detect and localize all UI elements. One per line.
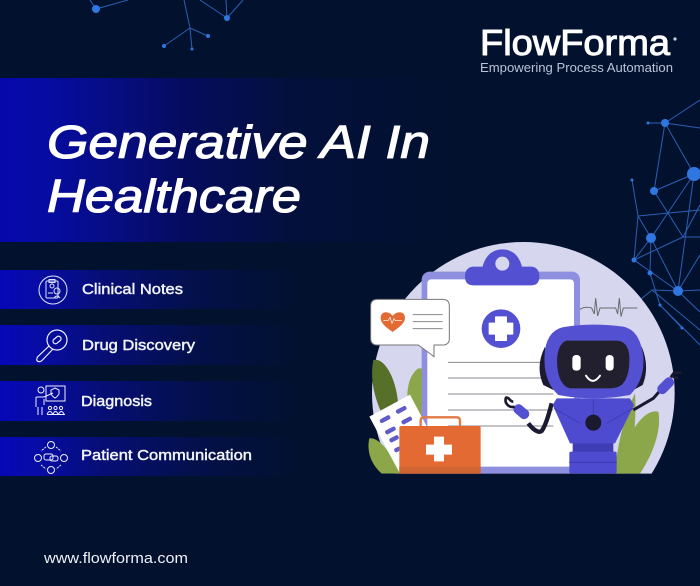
illustration: doctor robot with clipboard [368, 242, 682, 474]
label: Clinical Notes [82, 281, 183, 298]
list item: Patient Communication [0, 437, 300, 476]
network decoration: top [90, 0, 243, 50]
speech bubble [371, 299, 449, 357]
title: Healthcare [47, 170, 301, 222]
ears [540, 347, 646, 390]
website: www.flowforma.com [43, 550, 188, 567]
icon: communication cycle [34, 442, 68, 474]
icon: presenter at board [36, 386, 65, 415]
label: Drug Discovery [82, 337, 196, 354]
clip [465, 249, 539, 285]
pill pack [369, 394, 426, 472]
list item: Diagnosis [0, 381, 300, 421]
lavender dome [372, 242, 675, 474]
first aid kit [399, 417, 481, 474]
heartbeat line [580, 298, 637, 317]
robot [506, 325, 682, 474]
icon: clinical notes [39, 276, 67, 304]
clipboard [422, 249, 580, 474]
title: Generative AI In [47, 116, 430, 168]
arms [528, 403, 552, 432]
title band [0, 78, 450, 242]
label: Patient Communication [81, 447, 252, 464]
network decoration: right [630, 100, 700, 345]
cross badge [482, 309, 520, 348]
label: Diagnosis [81, 393, 152, 410]
icon: magnifier with pill [37, 330, 67, 362]
head [544, 325, 643, 398]
torso [553, 398, 634, 443]
logo: FlowForma: Empowering Process Automation [480, 61, 673, 75]
ruled lines [448, 362, 553, 426]
right plant [615, 393, 659, 474]
list item: Drug Discovery [0, 325, 300, 365]
base [572, 443, 614, 452]
logo: FlowForma: FlowForma [480, 22, 671, 63]
title [47, 116, 430, 222]
list item: Clinical Notes [0, 270, 300, 309]
plants [368, 360, 425, 474]
face [557, 341, 629, 388]
